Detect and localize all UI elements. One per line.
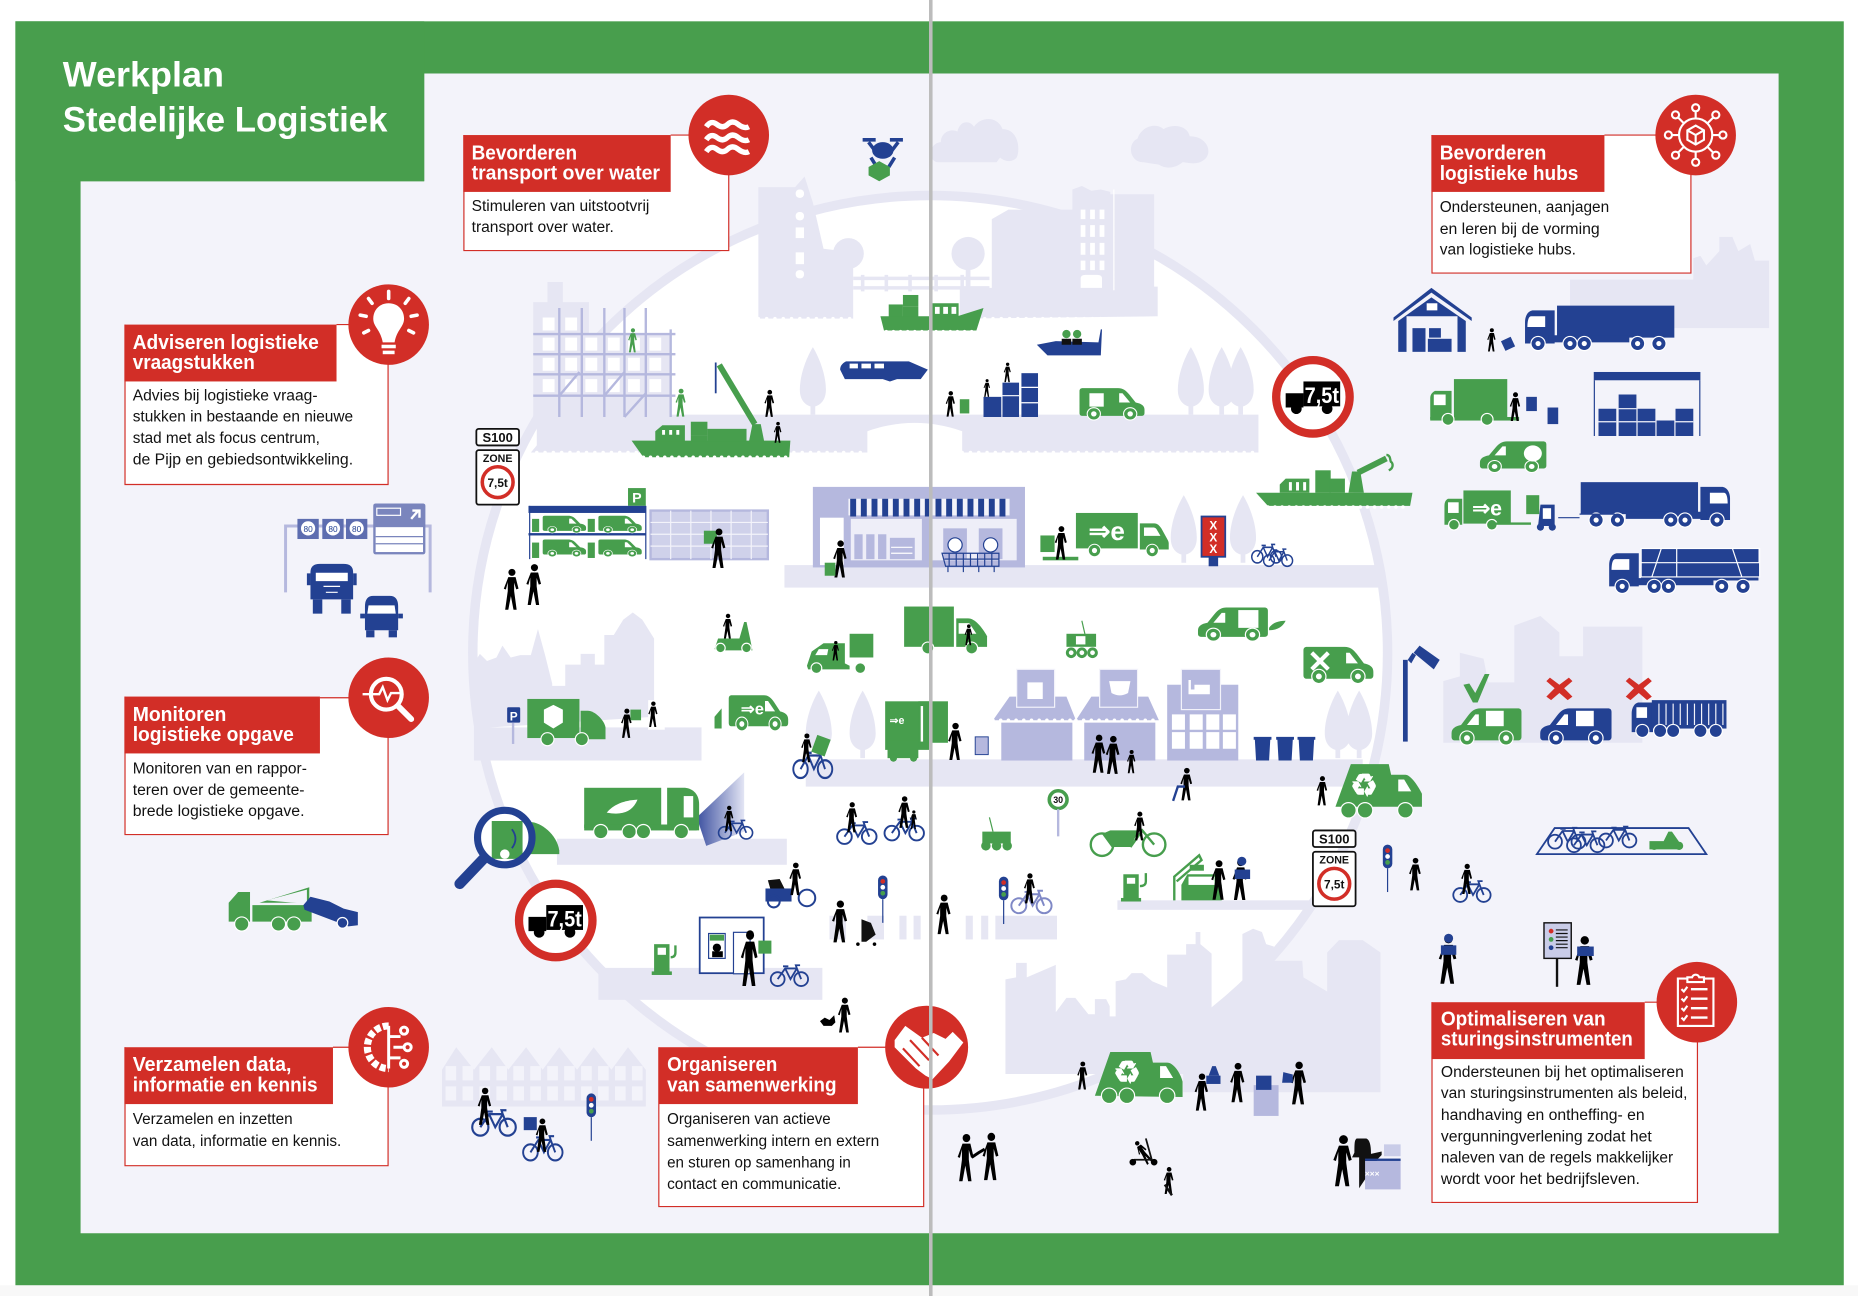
green electric truck with forklift: ⇒e: [1472, 496, 1502, 520]
illustration: green crane ship: [632, 363, 790, 457]
panel: Bevorderen transport over water: Bevorderen: [472, 142, 577, 164]
panel: Optimaliseren van sturingsinstrumenten: sturingsinstrumenten: [1441, 1028, 1633, 1050]
icon: clipboard checklist: [1678, 975, 1713, 1026]
cyclists mid-city: [837, 796, 924, 844]
title block: [15, 21, 424, 181]
illustration: scaffold around building: [533, 308, 675, 417]
panel: Verzamelen data, informatie en kennis: van data, informatie en kennis.: [133, 1133, 341, 1150]
gantry with speed signs and blue truck and van: 80: [328, 524, 338, 534]
blue waste bins: [1254, 737, 1315, 761]
green recycling truck and people with waste: [1077, 1052, 1306, 1116]
title: [63, 54, 388, 139]
icon: water waves: [706, 122, 749, 152]
illustration: stacked blue boxes with workers: [946, 363, 1038, 417]
third ground band: [806, 759, 1363, 787]
green recycling truck: ♻: [1350, 768, 1378, 803]
sign: S100 zone 7.5t, top: [476, 429, 519, 505]
panel: Optimaliseren van sturingsinstrumenten: [1431, 962, 1737, 1202]
panel: Bevorderen logistieke hubs: Bevorderen: [1440, 142, 1546, 164]
panel: Monitoren logistieke opgave: teren over de gemeente-: [133, 782, 305, 799]
traffic light, runner, cyclist: [1383, 845, 1491, 902]
green fridge truck: [885, 701, 948, 762]
panel: Optimaliseren van sturingsinstrumenten: Optimaliseren van: [1441, 1008, 1606, 1030]
charging station: [652, 944, 675, 975]
panel: Bevorderen transport over water: [463, 95, 769, 251]
blue semi truck: [1525, 306, 1674, 351]
panel: Organiseren van samenwerking: [659, 1006, 968, 1207]
parking sign and green parcel truck: [507, 699, 606, 746]
panel: Bevorderen logistieke hubs: logistieke hubs: [1440, 163, 1578, 185]
panel: Organiseren van samenwerking: contact en communicatie.: [667, 1176, 841, 1193]
icon: hub network with parcel: [1665, 104, 1726, 166]
elderly with walker: [1173, 768, 1192, 801]
green robot 2 and 30 sign: 30: [1053, 795, 1063, 805]
illustration: blue tour boat: [840, 361, 928, 381]
police officers and info board: [1439, 923, 1594, 987]
sign: S100 zone 7.5t, top: 7,5t: [487, 476, 508, 490]
illustration: green electric truck: [1040, 513, 1169, 560]
canal house left tower: [758, 177, 853, 319]
green recycling truck and people with waste: ♻: [1113, 1055, 1141, 1090]
charger and taxi rank: [1121, 855, 1250, 902]
panel: Optimaliseren van sturingsinstrumenten: wordt voor het bedrijfsleven.: [1440, 1171, 1640, 1188]
gantry with speed signs and blue truck and van: 80: [352, 524, 362, 534]
panel: Monitoren logistieke opgave: Monitoren: [133, 704, 226, 726]
icon: magnifier with pulse: [363, 679, 411, 719]
sign: no trucks over 7.5t, top: 7,5t: [1305, 383, 1339, 408]
illustration: green barge on canal: [880, 295, 984, 332]
sign: S100 zone 7.5t, right: 7,5t: [1324, 877, 1345, 891]
right skyline: [1443, 616, 1642, 743]
panel: Adviseren logistieke vraagstukken: [124, 284, 429, 485]
background: large white city circle: [473, 195, 1388, 1110]
panel: Adviseren logistieke vraagstukken: Adviseren logistieke: [133, 332, 319, 354]
banned: blue van with red cross: [1540, 678, 1612, 745]
icon: drone with parcel: [863, 140, 903, 181]
row house windows: [446, 1073, 646, 1093]
panel: Organiseren van samenwerking: en sturen op samenhang in: [667, 1154, 851, 1171]
green cargo bike: [1091, 812, 1165, 856]
panel: Optimaliseren van sturingsinstrumenten: handhaving en ontheffing- en: [1441, 1107, 1645, 1124]
panel: Adviseren logistieke vraagstukken: Advies bij logistieke vraag-: [133, 387, 318, 404]
left skyline: [474, 612, 654, 729]
green truck with driver: [904, 607, 987, 654]
scaffolded building: [533, 282, 671, 417]
panel: Bevorderen transport over water: transport over water.: [472, 219, 614, 236]
sign: S100 zone 7.5t, right: S100: [1319, 831, 1349, 846]
panel: Adviseren logistieke vraagstukken: stukken in bestaande en nieuwe: [133, 409, 353, 426]
woman walking dog: [820, 998, 850, 1032]
green van with leaf: [1480, 441, 1546, 473]
sign: S100 zone 7.5t, right: ZONE: [1319, 855, 1349, 867]
panel: Verzamelen data, informatie en kennis: Verzamelen en inzetten: [133, 1111, 293, 1128]
family walking: [1092, 735, 1135, 774]
people exchanging parcel: [621, 700, 665, 738]
cyclist courier: [793, 733, 832, 778]
banned: blue container truck with red cross: [1626, 678, 1726, 737]
handshake people: [958, 1133, 998, 1181]
connector line: [1558, 517, 1580, 519]
panel: Optimaliseren van sturingsinstrumenten: naleven van de regels makkelijker: [1441, 1150, 1673, 1167]
hotel: [1167, 669, 1238, 761]
sign: no trucks over 7.5t, top: [1276, 360, 1350, 434]
gantry with speed signs and blue truck and van: 80: [303, 524, 313, 534]
illustration: green ship with crane: [1256, 455, 1412, 507]
green service van with tools: [1303, 647, 1373, 684]
panel: Optimaliseren van sturingsinstrumenten: vergunningverlening zodat het: [1441, 1128, 1653, 1145]
off-white bottom margin: [0, 1285, 1858, 1296]
blue flatbed semi with load: [1609, 548, 1760, 594]
panel: Verzamelen data, informatie en kennis: Verzamelen data,: [133, 1054, 291, 1076]
panel: Adviseren logistieke vraagstukken: vraagstukken: [133, 352, 255, 374]
dog in cargo bike: [765, 863, 815, 907]
gantry with speed signs and blue truck and van: [286, 503, 430, 637]
green delivery robot: [1066, 621, 1098, 658]
green truck with leaf and camera cone: [584, 772, 753, 846]
panel: Organiseren van samenwerking: Organiseren van actieve: [667, 1111, 831, 1128]
panel: Optimaliseren van sturingsinstrumenten: Ondersteunen bij het optimaliseren: [1441, 1064, 1684, 1081]
shops: food and noodle bar: [993, 669, 1159, 761]
trees on quay: [800, 347, 826, 415]
road bands: [557, 839, 787, 865]
panel: Monitoren logistieke opgave: brede logistieke opgave.: [133, 803, 305, 820]
camera pole: [1403, 646, 1440, 742]
page fold line: [929, 0, 933, 1296]
clouds: [931, 119, 1018, 162]
sign: Amsterdam XXX pole: X: [1209, 519, 1217, 533]
bottom right skyline: [1005, 929, 1380, 1092]
pick-up point kiosk with person and bike: [700, 918, 808, 986]
illustration: shop front with awning: [813, 487, 1025, 567]
worker with hand truck: [948, 723, 988, 760]
service desk with clerk: ×××: [1365, 1168, 1380, 1178]
panel: Bevorderen logistieke hubs: Ondersteunen, aanjagen: [1440, 199, 1609, 216]
panel: Verzamelen data, informatie en kennis: [124, 1007, 429, 1166]
sign: Amsterdam XXX pole: [1202, 517, 1225, 566]
icon: light bulb: [360, 291, 417, 354]
icon: handshake: [895, 1026, 963, 1079]
green fridge truck: ⇒e: [890, 715, 905, 727]
sign: S100 zone 7.5t, top: ZONE: [483, 453, 512, 465]
panel: Bevorderen logistieke hubs: van logistieke hubs.: [1440, 242, 1576, 259]
illustration: blue warehouse: [1394, 288, 1472, 352]
illustration: green electric truck: ⇒e: [1089, 516, 1125, 546]
quay band with bridge arch: [531, 415, 1258, 453]
pedestrians, prams and traffic lights: [832, 875, 1008, 946]
panel: Bevorderen transport over water: Stimuleren van uitstootvrij: [472, 198, 649, 215]
illustration: green truck unloading: [1430, 379, 1558, 425]
shopper with hand truck: [825, 540, 847, 578]
sign: no trucks over 7.5t, left: 7,5t: [547, 906, 582, 931]
cyclist at crossing: [1011, 873, 1052, 913]
green robot 2 and 30 sign: [981, 791, 1067, 851]
panel: Organiseren van samenwerking: samenwerking intern en extern: [667, 1133, 879, 1150]
panel: Adviseren logistieke vraagstukken: de Pijp en gebiedsontwikkeling.: [133, 451, 353, 468]
title: Stedelijke Logistiek: [63, 99, 388, 139]
panel: Bevorderen transport over water: transport over water: [472, 162, 660, 184]
panel: Organiseren van samenwerking: van samenwerking: [667, 1075, 837, 1097]
panel: Optimaliseren van sturingsinstrumenten: van sturingsinstrumenten als beleid,: [1441, 1085, 1687, 1102]
title: Werkplan: [63, 54, 224, 94]
illustration: two pedestrians: [504, 564, 541, 610]
panel: Bevorderen logistieke hubs: [1431, 95, 1736, 273]
panel: Monitoren logistieke opgave: logistieke opgave: [133, 724, 294, 746]
long blue semi truck: [1580, 482, 1730, 527]
tow truck with blue car: [229, 887, 358, 931]
illustration: parking garage with green cars: P: [632, 490, 642, 506]
canal house right towers: [960, 186, 1158, 319]
bike parking with green scooter: [1537, 827, 1706, 854]
ground band: [784, 565, 1384, 588]
illustration: grid facade with courier: [651, 511, 768, 568]
illustration: green delivery van: [1079, 388, 1145, 420]
sign: S100 zone 7.5t, right: [1313, 830, 1356, 906]
illustration: speed boat with people: [1037, 329, 1102, 355]
panel: Monitoren logistieke opgave: [124, 657, 429, 835]
scaffold worker: [628, 328, 637, 352]
green scooter with rider: [715, 614, 752, 653]
green electric van and charger: ⇒e: [741, 699, 764, 718]
green electric van and charger: [715, 695, 788, 731]
panel: Bevorderen logistieke hubs: en leren bij de vorming: [1440, 221, 1600, 238]
background: pale city silhouettes: [442, 119, 1769, 1106]
sign: Amsterdam XXX pole: X: [1209, 542, 1217, 556]
sign: no trucks over 7.5t, left: [519, 884, 592, 957]
sign: S100 zone 7.5t, top: S100: [482, 430, 513, 445]
parking sign and green parcel truck: P: [510, 709, 518, 723]
green delivery tuk-tuk: [807, 634, 873, 673]
green recycling truck: [1317, 764, 1422, 818]
shopping trolleys: [942, 553, 999, 572]
panel: Organiseren van samenwerking: Organiseren: [667, 1054, 777, 1076]
green van with box and leaf: [1198, 607, 1286, 641]
illustration: pallet rack with blue boxes: [1594, 372, 1700, 436]
bottom left row houses: [442, 1047, 646, 1106]
green electric truck with forklift: [1444, 490, 1556, 531]
cyclists bottom left: [472, 1088, 596, 1160]
panel: Adviseren logistieke vraagstukken: stad met als focus centrum,: [133, 430, 320, 447]
service desk with clerk: [1333, 1135, 1401, 1189]
scaffolded building windows: [543, 317, 661, 392]
allowed: green van with check mark: [1452, 674, 1521, 745]
panel: Verzamelen data, informatie en kennis: informatie en kennis: [133, 1075, 318, 1097]
illustration: parking garage with green cars: [528, 488, 646, 559]
icon: gear with circuit: [367, 1026, 411, 1069]
sign: Amsterdam XXX pole: X: [1209, 530, 1217, 544]
scooter and skater: [1129, 1138, 1173, 1195]
parked bicycles: [1252, 544, 1293, 566]
far right skyline: [1570, 237, 1769, 328]
worker with trolley: [1487, 328, 1515, 351]
canal house windows and quay waves: [537, 190, 1258, 453]
panel: Monitoren logistieke opgave: Monitoren van en rappor-: [133, 761, 307, 778]
magnifier over green van: [460, 810, 559, 884]
